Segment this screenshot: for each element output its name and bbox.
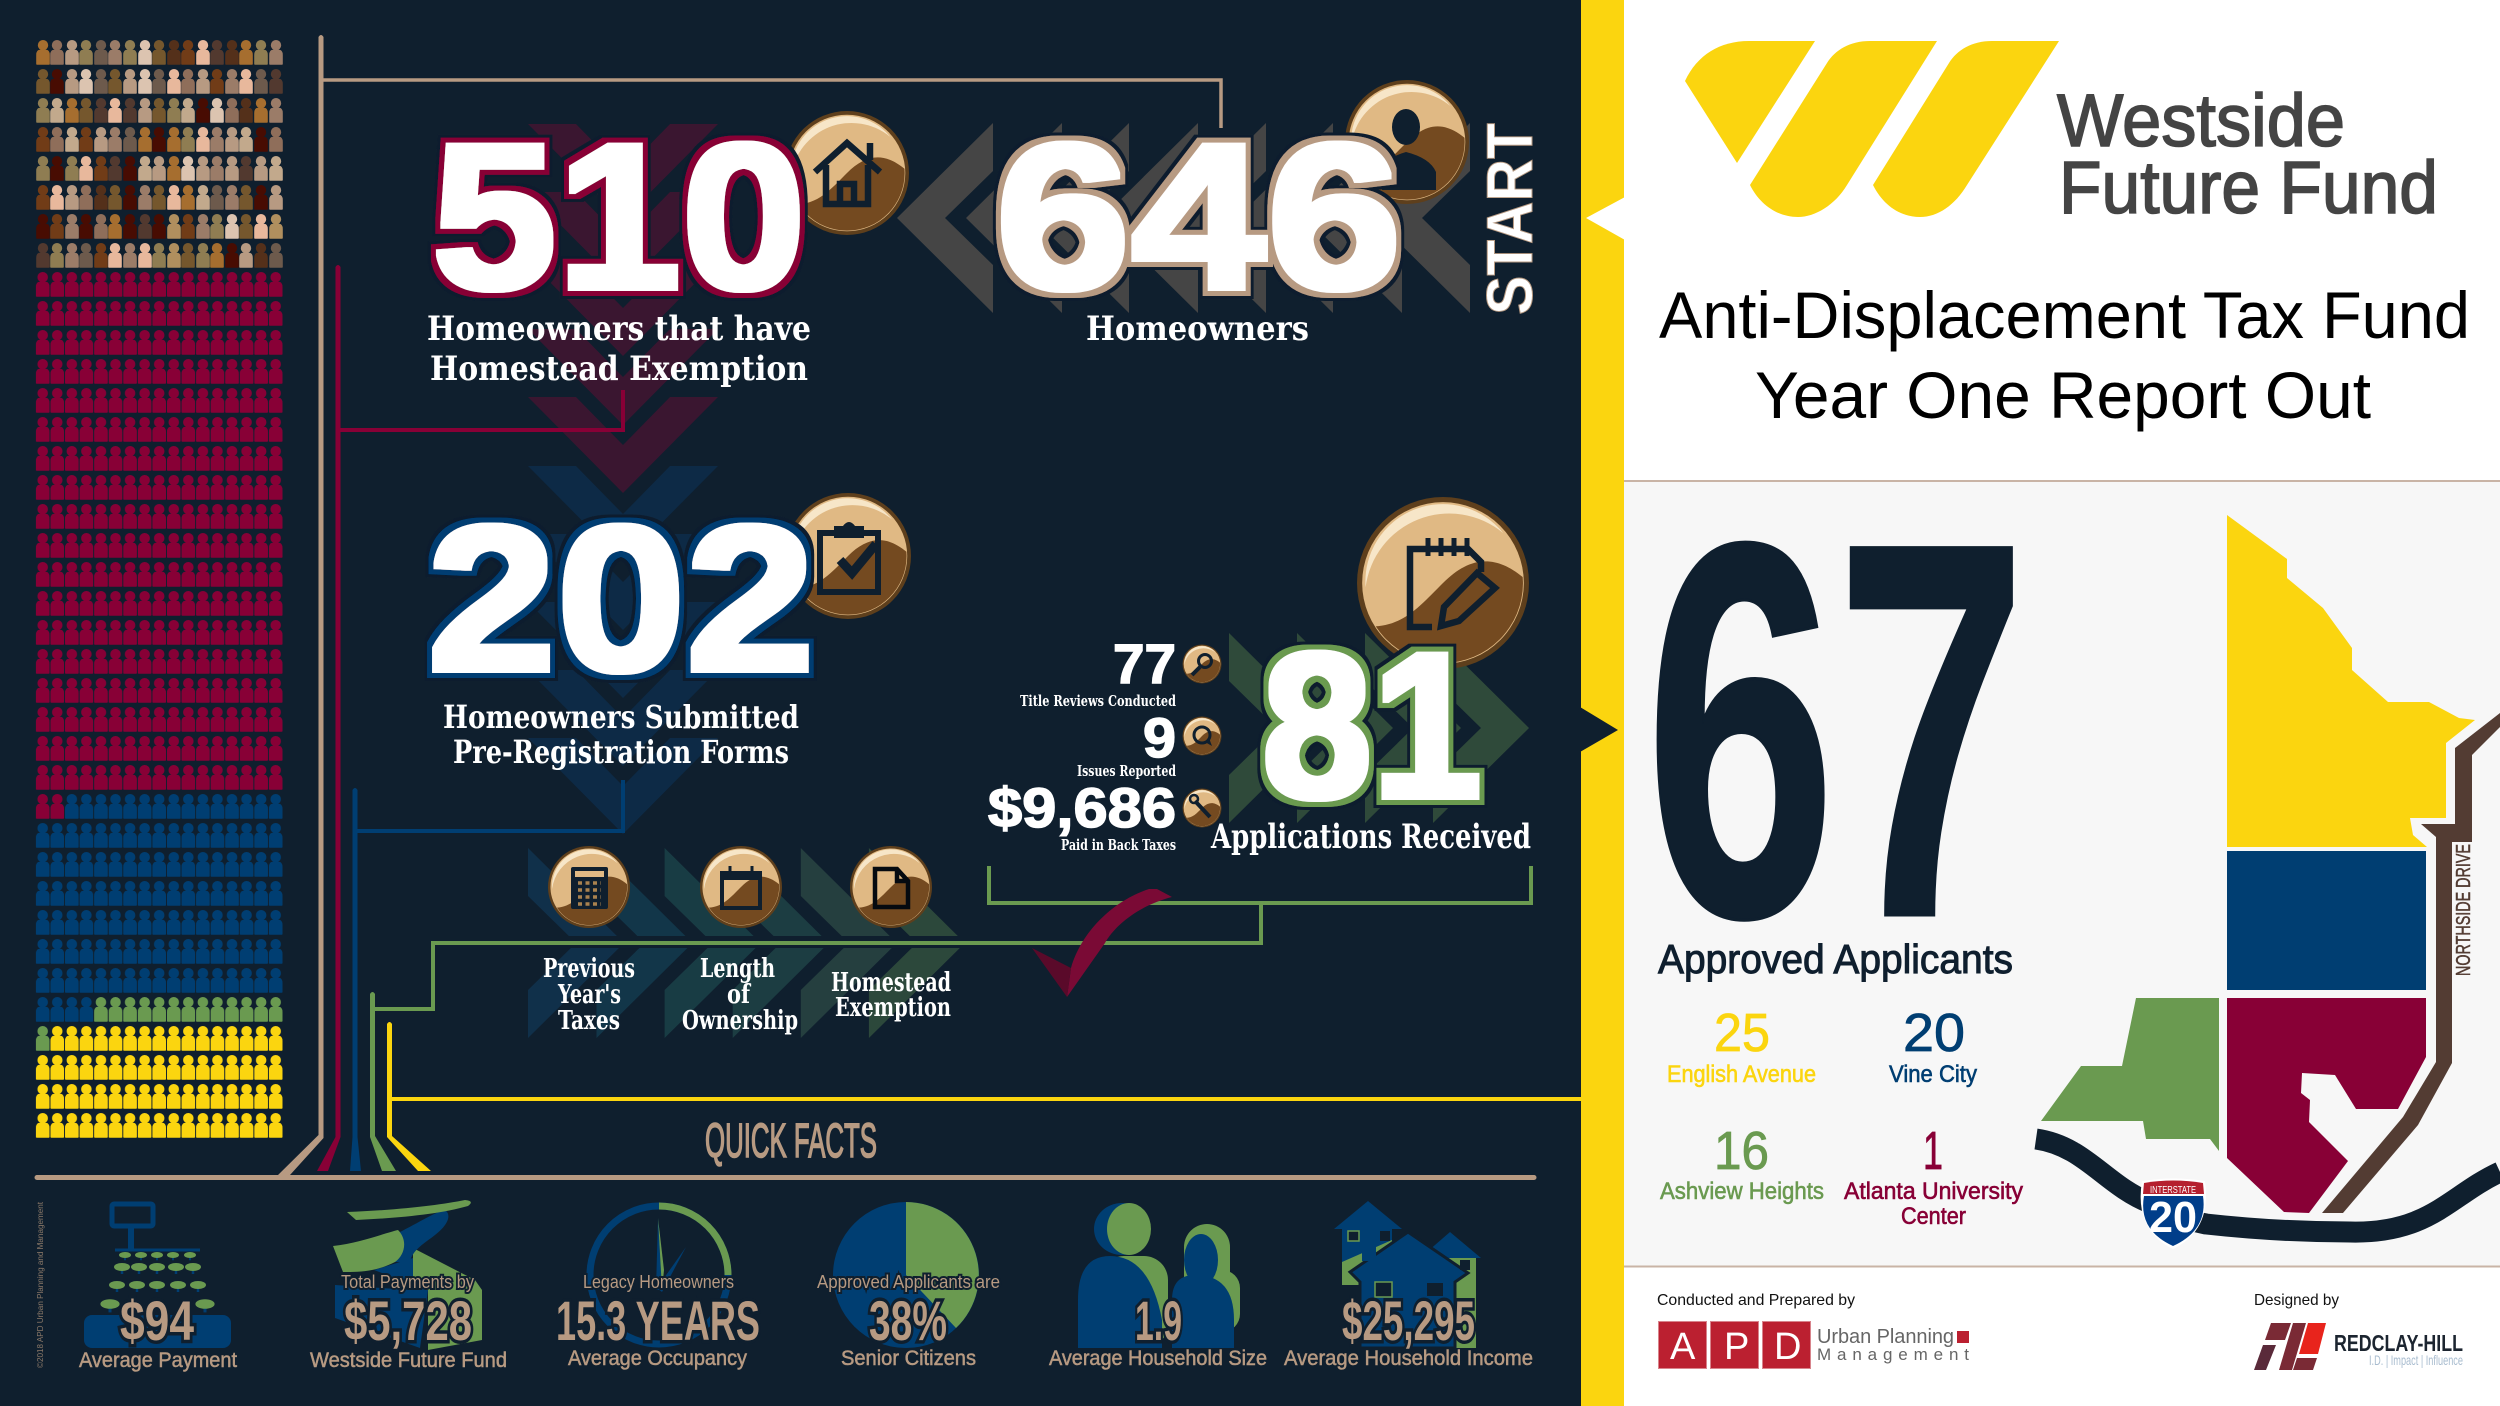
fact: senior citizens: Approved Applicants are bbox=[817, 1272, 1000, 1292]
factor: length of ownership bbox=[682, 846, 798, 1036]
factor label: Exemption bbox=[835, 993, 951, 1023]
label lines: Pre-Registration Forms bbox=[453, 733, 789, 771]
flow lines converging on quick facts bbox=[278, 35, 1581, 1175]
people: blue pre-registration group bbox=[35, 792, 283, 1024]
fact: senior citizens: Senior Citizens bbox=[841, 1347, 976, 1370]
logo: redclay-hill bbox=[2254, 1323, 2463, 1370]
fact: household size: 1.9 bbox=[1135, 1289, 1182, 1352]
panel: footer credits background bbox=[1624, 1267, 2500, 1406]
logo mark bbox=[1685, 41, 2059, 217]
fact: average payment: $94 bbox=[120, 1289, 194, 1352]
blue flow line bbox=[350, 780, 623, 1171]
icon: magnifier medallion bbox=[1182, 644, 1222, 684]
neighborhood: ashview heights: Ashview Heights bbox=[1660, 1178, 1824, 1205]
map region: atlanta university center bbox=[2227, 998, 2426, 1213]
icon: calendar medallion bbox=[700, 846, 782, 928]
fact: average occupancy: Legacy Homeowners bbox=[583, 1272, 734, 1292]
panel: people pictogram of 646 homeowners bbox=[35, 40, 283, 1140]
stat: back taxes paid: $9,686 bbox=[988, 776, 1176, 839]
fact: senior citizens bbox=[817, 1202, 1000, 1370]
icon: pie chart 38 percent bbox=[833, 1202, 979, 1348]
green flow line bbox=[370, 866, 1531, 1171]
label homeowners: Homeowners bbox=[1086, 309, 1309, 349]
copyright: ©2018 APD Urban Planning and Management bbox=[36, 1201, 45, 1368]
neighborhood: vine city: 20 bbox=[1903, 1003, 1965, 1063]
neighborhood: english avenue: 25 bbox=[1714, 1003, 1770, 1063]
neighborhood: atlanta university center: 1 bbox=[1923, 1121, 1943, 1181]
fact: household income: Average Household Income bbox=[1284, 1347, 1533, 1370]
fact: household size bbox=[1049, 1203, 1267, 1370]
factor label: Homestead bbox=[831, 968, 951, 998]
map region: ashview heights bbox=[2041, 998, 2219, 1151]
label lines: Homeowners that have bbox=[427, 309, 811, 349]
stat: 202 pre-registration forms bbox=[427, 483, 815, 771]
fact: total payments bbox=[310, 1200, 507, 1372]
panel: white header bbox=[1624, 0, 2500, 480]
dark notch arrow bbox=[1580, 707, 1618, 752]
factor label: Previous bbox=[543, 954, 635, 984]
title: Year One Report Out bbox=[1755, 358, 2371, 432]
neighborhood: ashview heights: 16 bbox=[1714, 1121, 1769, 1181]
blue chevrons bbox=[528, 466, 718, 834]
road: interstate 20 bbox=[2036, 1139, 2500, 1232]
neighborhood: vine city bbox=[1889, 1003, 1977, 1088]
factor label: Year's bbox=[557, 980, 621, 1010]
stat: 9 issues reported bbox=[1077, 706, 1176, 780]
big number 67: 67 bbox=[1645, 433, 2027, 1029]
credit: designed by: Designed by bbox=[2254, 1292, 2339, 1309]
road: northside drive bbox=[2322, 713, 2500, 1213]
dark background panel bbox=[0, 0, 1581, 1406]
fact: total payments: $5,728 bbox=[344, 1289, 472, 1352]
crimson flow line bbox=[317, 265, 623, 1171]
green chevrons bbox=[1229, 633, 1529, 823]
people: crimson homestead exemption group bbox=[35, 270, 283, 820]
neighborhood: ashview heights bbox=[1660, 1121, 1824, 1205]
yellow divider band bbox=[1581, 0, 1624, 1406]
fact: household income bbox=[1284, 1201, 1533, 1370]
stat: 77 title reviews: Title Reviews Conducted bbox=[1020, 693, 1176, 710]
icon: clipboard medallion bbox=[785, 493, 911, 619]
icon: two people bbox=[1078, 1203, 1240, 1348]
tan flow line bbox=[278, 35, 1221, 1175]
fact: household income: $25,295 bbox=[1342, 1289, 1475, 1352]
icon: person medallion bbox=[1345, 80, 1469, 204]
icon: calculator medallion bbox=[548, 846, 630, 928]
neighborhood: english avenue bbox=[1667, 1003, 1816, 1088]
logo: westside future fund bbox=[1685, 41, 2438, 229]
quick facts divider bbox=[37, 1175, 1534, 1180]
road label: NORTHSIDE DRIVE bbox=[2453, 844, 2475, 976]
people: 136 homeowners without exemption, mixed tones bbox=[36, 40, 283, 268]
people: yellow approved group bbox=[35, 1024, 283, 1140]
icon: document medallion bbox=[850, 846, 932, 928]
neighborhood: english avenue: English Avenue bbox=[1667, 1061, 1816, 1088]
factor: homestead exemption bbox=[831, 846, 951, 1023]
logo wordmark: Westside bbox=[2057, 79, 2345, 162]
fact: total payments: Total Payments by bbox=[341, 1272, 474, 1292]
panel: approved applicants bbox=[1624, 481, 2500, 1267]
map region: english avenue bbox=[2227, 515, 2475, 847]
gray start chevrons bbox=[897, 123, 1470, 313]
white notch arrow bbox=[1586, 197, 1625, 240]
logo: APD: A bbox=[1670, 1326, 1696, 1368]
factor: previous year's taxes bbox=[543, 846, 635, 1036]
stat: back taxes paid: Paid in Back Taxes bbox=[1061, 837, 1176, 854]
fact: average occupancy: 15.3 YEARS bbox=[556, 1289, 760, 1352]
logo: APD: D bbox=[1774, 1326, 1801, 1368]
icon: clock bbox=[590, 1206, 728, 1344]
crimson chevrons bbox=[528, 124, 718, 493]
title: Anti-Displacement Tax Fund bbox=[1659, 278, 2470, 352]
icon: hand and box bbox=[333, 1200, 482, 1350]
icon: house medallion bbox=[785, 111, 909, 235]
icon: interstate 20 shield bbox=[2141, 1178, 2206, 1249]
credit: conducted and prepared by: Conducted and Prepared by bbox=[1657, 1292, 1855, 1309]
stat: 77 title reviews bbox=[1020, 632, 1176, 710]
number 646: 646 bbox=[995, 101, 1402, 332]
logo wordmark: Future Fund bbox=[2059, 146, 2438, 229]
stat: 9 issues reported: Issues Reported bbox=[1077, 763, 1176, 780]
icon: cash register bbox=[84, 1204, 231, 1348]
neighborhood: atlanta university center: Atlanta University bbox=[1844, 1178, 2023, 1205]
stat: 77 title reviews: 77 bbox=[1113, 632, 1176, 695]
number 81: 81 bbox=[1262, 610, 1482, 841]
factor label: Length bbox=[700, 954, 775, 984]
icon: wrench medallion bbox=[1182, 788, 1222, 828]
neighborhood: atlanta university center bbox=[1844, 1121, 2023, 1230]
start label: START bbox=[1473, 123, 1546, 315]
fact: total payments: Westside Future Fund bbox=[310, 1349, 507, 1372]
stat: 9 issues reported: 9 bbox=[1143, 706, 1176, 769]
factor label: Taxes bbox=[558, 1006, 620, 1036]
icon: crimson checkmark bbox=[1032, 889, 1172, 997]
heading: quick facts: QUICK FACTS bbox=[705, 1115, 877, 1168]
stat: 510 homestead exemption bbox=[427, 101, 811, 389]
logo: APD: Management bbox=[1817, 1345, 1969, 1364]
fact: average occupancy: Average Occupancy bbox=[568, 1347, 747, 1370]
icon: notepad medallion bbox=[1357, 497, 1529, 669]
yellow flow line bbox=[387, 1022, 1581, 1171]
map region: vine city bbox=[2227, 851, 2426, 990]
label lines: Homestead Exemption bbox=[430, 349, 808, 389]
map of neighborhoods bbox=[2036, 515, 2500, 1249]
stat: 81 applications received bbox=[1210, 610, 1531, 857]
number 510: 510 bbox=[432, 101, 806, 332]
people: green applications group bbox=[35, 994, 283, 1052]
neighborhood: vine city: Vine City bbox=[1889, 1061, 1977, 1088]
fact: average payment: Average Payment bbox=[79, 1349, 237, 1372]
icon: interstate 20 shield: INTERSTATE bbox=[2150, 1185, 2196, 1196]
fact: senior citizens: 38% bbox=[869, 1289, 947, 1352]
label: Applications Received bbox=[1210, 817, 1531, 857]
icon: houses bbox=[1334, 1201, 1481, 1348]
fact: average occupancy bbox=[556, 1206, 760, 1370]
logo: redclay-hill: REDCLAY-HILL bbox=[2334, 1330, 2463, 1356]
factor label: Ownership bbox=[682, 1006, 798, 1036]
credit: conducted and prepared by bbox=[1657, 1292, 1969, 1368]
stat: 646 homeowners bbox=[995, 101, 1402, 349]
logo: APD: Urban Planning bbox=[1817, 1326, 1954, 1348]
icon: interstate 20 shield: 20 bbox=[2149, 1193, 2197, 1242]
factor chevrons bbox=[528, 848, 965, 1038]
number 202: 202 bbox=[427, 483, 815, 714]
logo: APD bbox=[1658, 1322, 1969, 1368]
factor label: of bbox=[727, 980, 751, 1010]
fact: average payment bbox=[79, 1204, 237, 1372]
icon: speech bubble medallion bbox=[1182, 716, 1222, 756]
label: approved applicants: Approved Applicants bbox=[1658, 936, 2013, 982]
neighborhood: atlanta university center: Center bbox=[1901, 1203, 1966, 1230]
credit: designed by bbox=[2254, 1292, 2463, 1370]
logo: APD: P bbox=[1724, 1326, 1749, 1368]
fact: household size: Average Household Size bbox=[1049, 1347, 1267, 1370]
label lines: Homeowners Submitted bbox=[443, 698, 799, 736]
